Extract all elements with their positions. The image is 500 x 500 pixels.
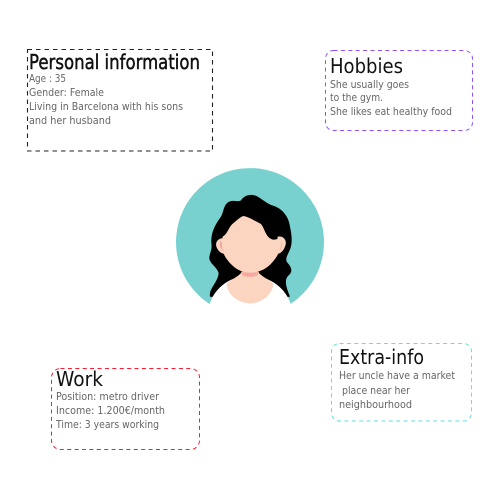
hair xyxy=(209,195,292,302)
text: hobbies details: to the gym. xyxy=(330,92,383,104)
text: hobbies details xyxy=(330,79,452,118)
heading: hobbies: Hobbies xyxy=(330,54,403,78)
text: extra info details: place near her xyxy=(342,385,411,397)
neck shadow xyxy=(242,272,258,277)
panel: personal information xyxy=(28,50,212,151)
text: personal details: Living in Barcelona with his sons xyxy=(29,101,183,113)
avatar: woman with dark wavy hair xyxy=(176,168,324,316)
text: personal details: and her husband xyxy=(29,115,111,127)
panel: work xyxy=(52,367,200,450)
ears xyxy=(216,236,286,254)
text: personal details: Gender: Female xyxy=(29,87,104,99)
text: work details: Position: metro driver xyxy=(56,391,160,403)
text: personal details: Age : 35 xyxy=(29,73,66,85)
text: extra info details: neighbourhood xyxy=(339,399,412,411)
white top xyxy=(210,276,291,316)
heading: extra info: Extra-info xyxy=(339,345,424,369)
panel: hobbies xyxy=(326,50,472,130)
face xyxy=(222,216,282,273)
text: hobbies details: She likes eat healthy food xyxy=(330,106,452,118)
panel: extra info xyxy=(332,344,472,421)
heading: work: Work xyxy=(56,367,103,391)
text: extra info details: Her uncle have a market xyxy=(339,370,455,382)
avatar background circle xyxy=(176,168,324,304)
heading: personal information: Personal information xyxy=(29,50,200,74)
text: work details: Income: 1.200€/month xyxy=(56,405,165,417)
text: extra info details xyxy=(339,370,455,411)
chest skin xyxy=(227,272,273,303)
text: hobbies details: She usually goes xyxy=(330,79,409,91)
text: work details: Time: 3 years working xyxy=(55,419,159,431)
text: work details xyxy=(55,391,165,431)
text: personal details xyxy=(29,73,183,127)
